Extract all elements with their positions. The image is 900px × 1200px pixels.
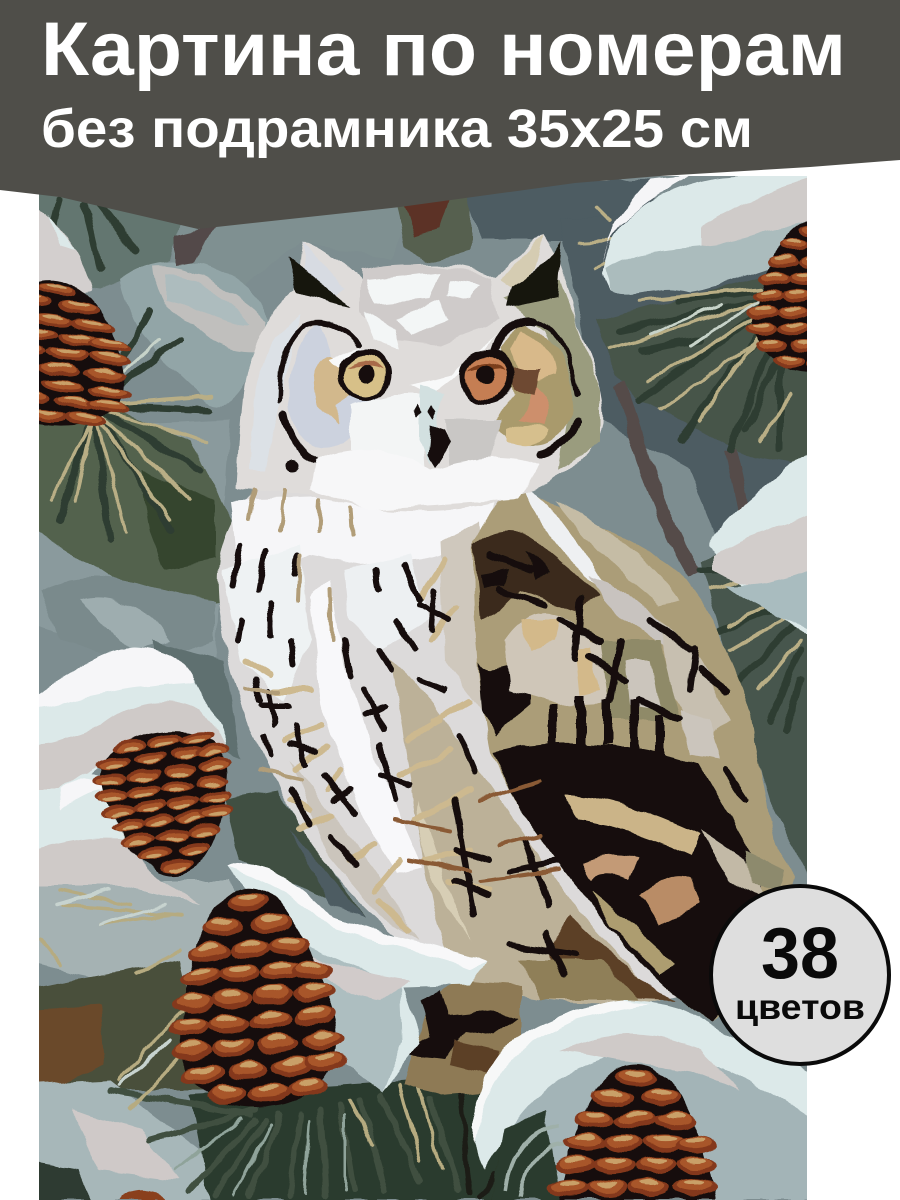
snow: top left bbox=[39, 210, 92, 294]
chest tan flecks bbox=[245, 560, 490, 930]
badge: 38 colours: 38 bbox=[761, 914, 839, 994]
subtitle: без подрамника 35х25 см bbox=[41, 99, 753, 159]
facial discs bbox=[289, 322, 380, 447]
owl bbox=[218, 233, 795, 1022]
chest bib bbox=[310, 450, 540, 510]
wing markings bbox=[490, 555, 745, 800]
pine cone: bottom bbox=[549, 1064, 718, 1200]
pine cone: top left bbox=[0, 268, 146, 436]
background: right foliage bbox=[596, 279, 807, 462]
facial ring bbox=[279, 322, 358, 400]
snow: centre bottom bbox=[228, 865, 485, 1092]
chest markings bbox=[233, 545, 575, 975]
badge: 38 colours bbox=[711, 886, 889, 1064]
snow: left bbox=[39, 647, 226, 812]
title: Картина по номерам bbox=[41, 7, 846, 92]
pine cone: top right bbox=[745, 221, 807, 372]
pine cone: middle left bbox=[92, 731, 234, 878]
wing pale leading edge bbox=[526, 492, 602, 584]
painting: snowy owl on a pine branch bbox=[39, 176, 807, 1200]
owl wing bbox=[472, 488, 795, 1022]
brows bbox=[330, 335, 497, 395]
background: left foliage bbox=[39, 419, 230, 658]
owl eyes bbox=[339, 349, 391, 401]
owl body bbox=[218, 470, 690, 1001]
head mottling bbox=[360, 265, 500, 345]
wing upper dark patch bbox=[473, 530, 600, 620]
snow: top right bbox=[602, 176, 807, 294]
wing dark band and stripes bbox=[492, 743, 759, 1022]
branch bbox=[405, 980, 520, 1095]
owl beak bbox=[420, 385, 445, 465]
ear tufts bbox=[288, 240, 562, 308]
snow: bottom right bbox=[472, 1000, 807, 1170]
badge: 38 colours: цветов bbox=[735, 988, 865, 1027]
snow: right bbox=[709, 454, 807, 634]
owl head bbox=[237, 233, 603, 512]
pine needles bbox=[40, 200, 800, 1198]
header banner bbox=[0, 0, 900, 229]
pine cone: large centre bbox=[168, 888, 348, 1108]
lower brown shadow bbox=[550, 915, 675, 1000]
